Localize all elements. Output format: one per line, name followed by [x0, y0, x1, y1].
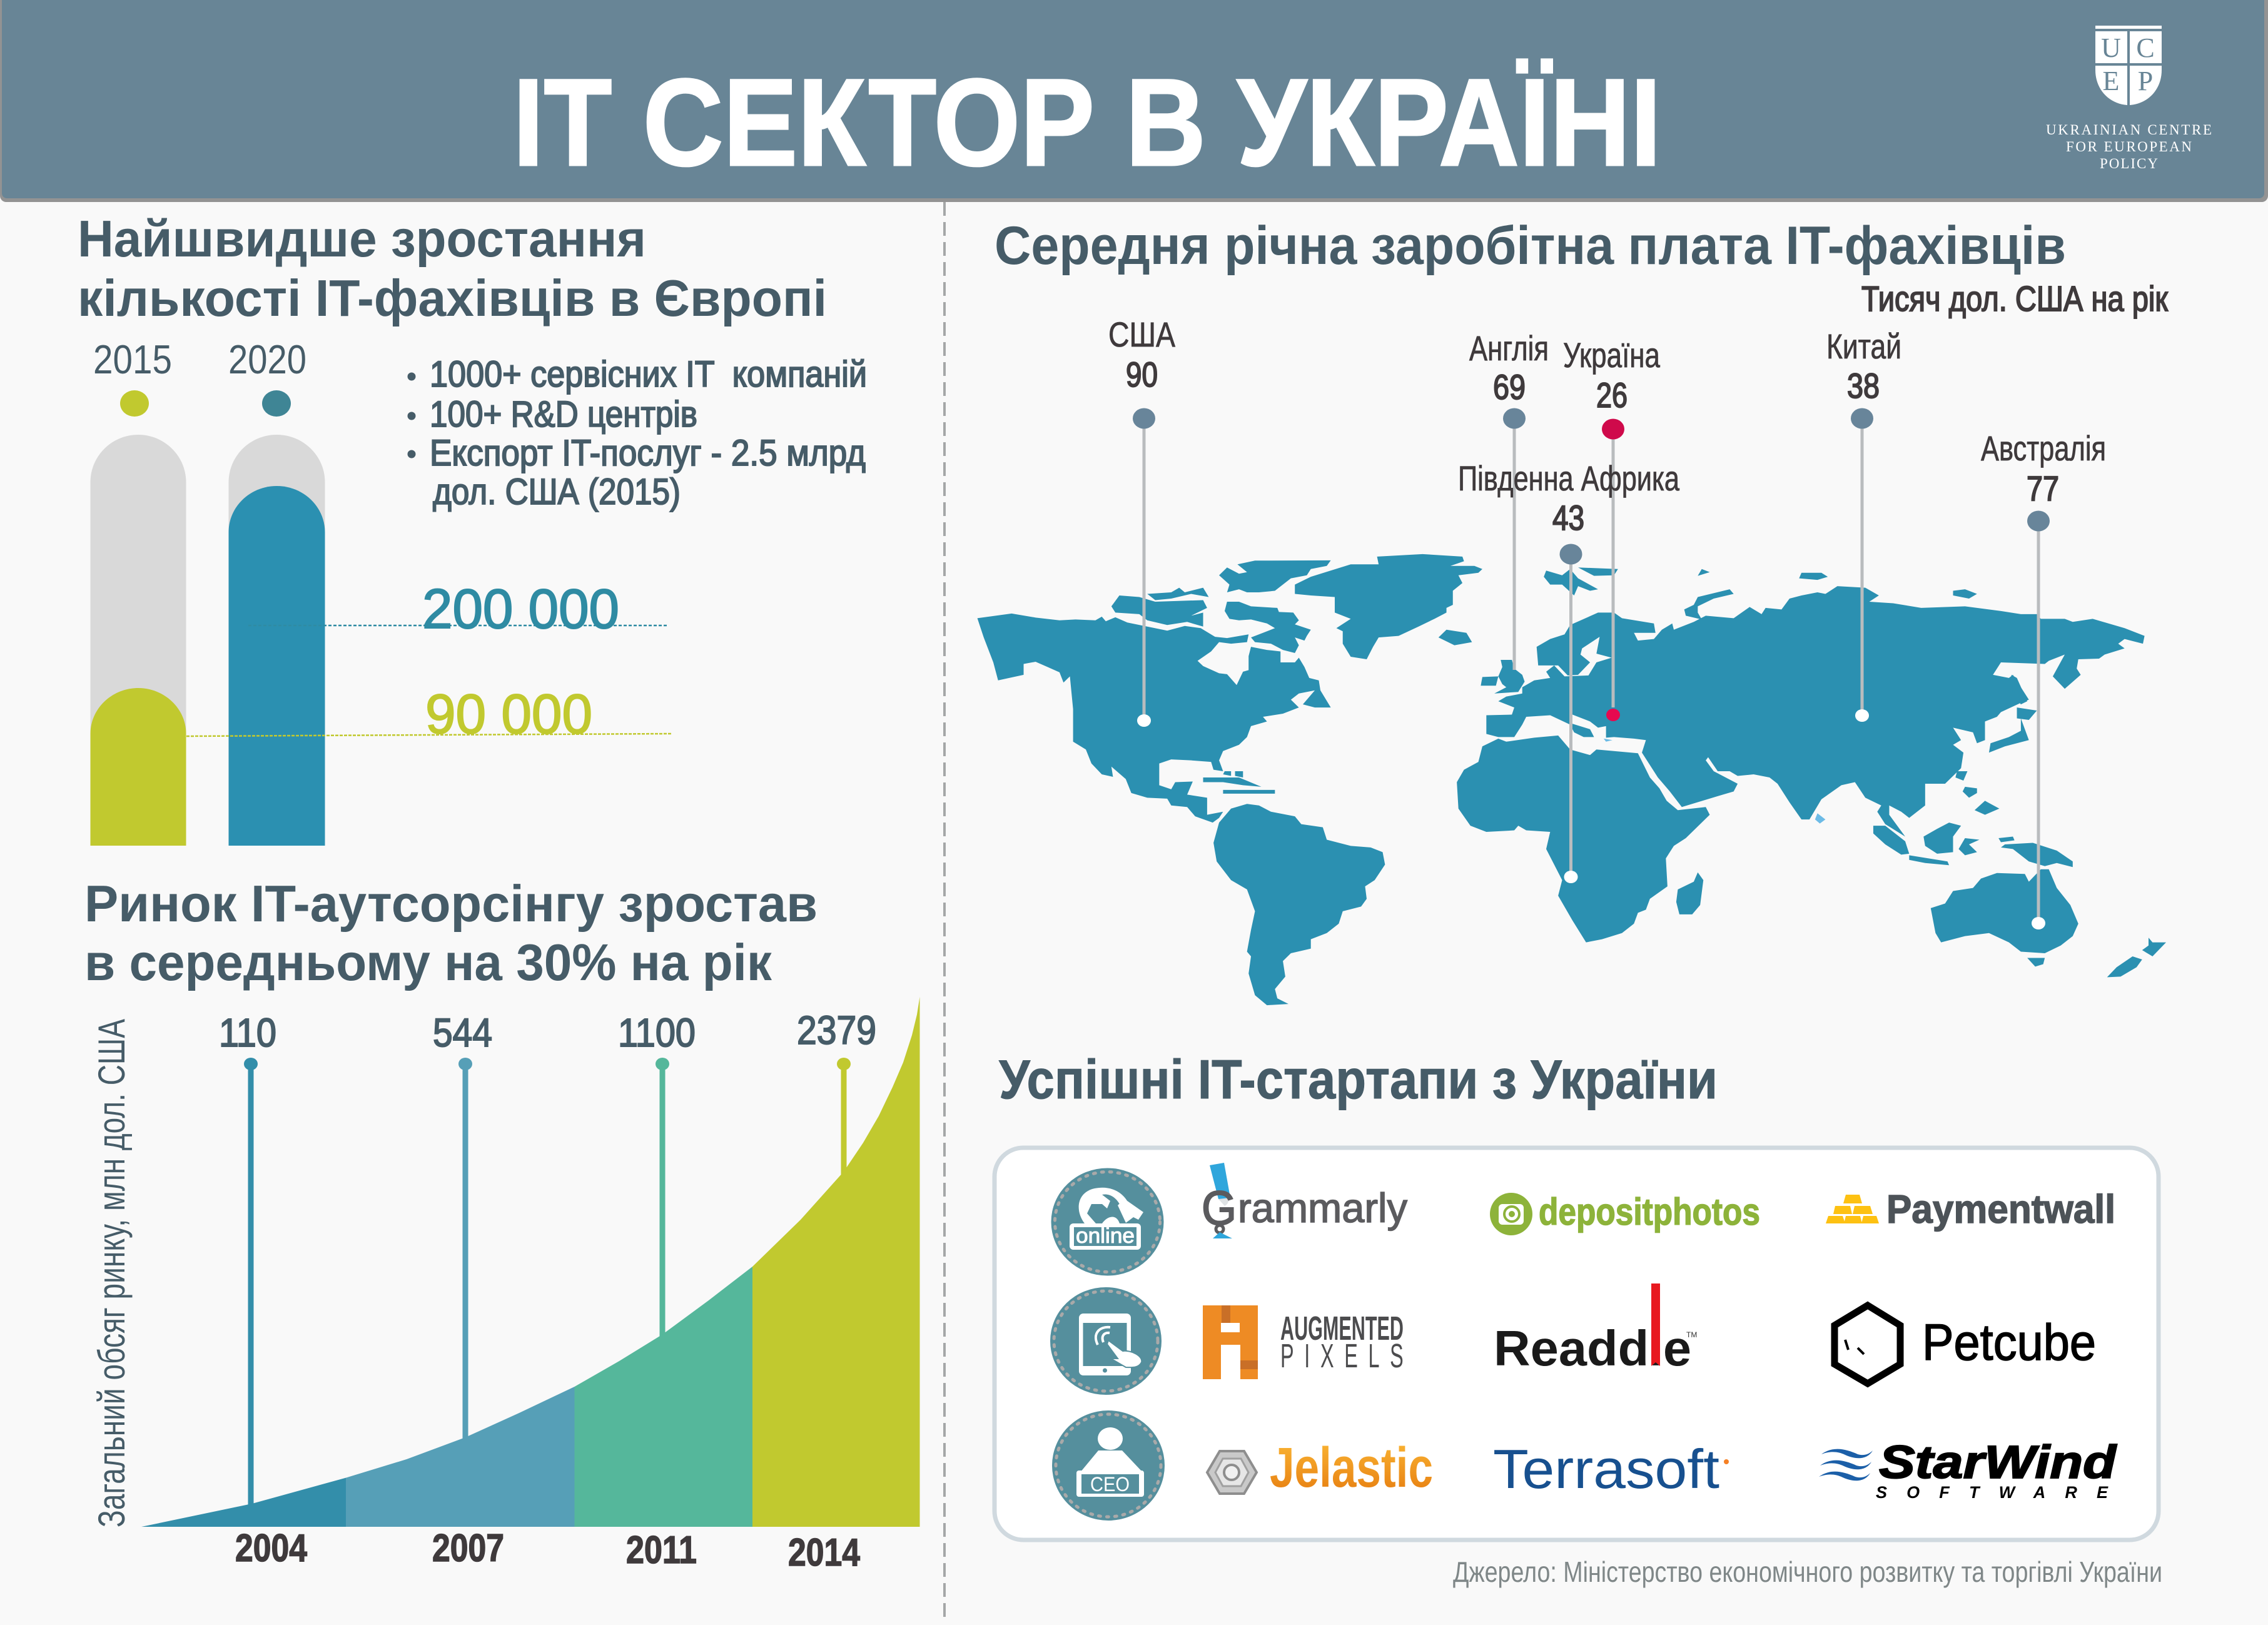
- pin 2007: 544: [433, 1010, 492, 1445]
- map pin: China 38: [1826, 327, 1901, 722]
- logo: Terrasoft: Terrasoft: [1493, 1438, 1719, 1500]
- heading: outsourcing market: в середньому на 30% на рік: [84, 933, 772, 991]
- logo: StarWind: SOFTWARE: [1876, 1483, 2109, 1502]
- world map: [978, 554, 2166, 1005]
- icon: CEO: CEO: [1090, 1473, 1130, 1496]
- year label 2020: 2020: [228, 337, 306, 382]
- map pin: USA 90: 90: [1126, 355, 1158, 394]
- bullet list: Експорт IT-послуг - 2.5 млрд: [430, 433, 866, 473]
- year 2014: 2014: [788, 1531, 860, 1574]
- value 200 000: 200 000: [422, 577, 619, 640]
- bullet list: 1000+ сервісних IT компаній: [430, 354, 867, 395]
- bar chart: IT specialists 2015 vs 2020: [90, 337, 671, 846]
- logo: UCEP shield: C: [2136, 33, 2155, 63]
- pin 2014: 2379: 2379: [797, 1008, 876, 1053]
- heading: fastest growth: Найшвидше зростання: [78, 210, 646, 268]
- heading: outsourcing market: Ринок IT-аутсорсінгу зростав: [84, 874, 818, 933]
- legend dot 2015: [120, 390, 149, 417]
- map pin: China 38: 38: [1847, 366, 1880, 405]
- axis label: Загальний обсяг ринку, млн дол. США: [91, 1019, 133, 1527]
- heading: outsourcing market: [84, 874, 818, 991]
- pin 2004: 110: [219, 1010, 276, 1514]
- pin 2011: 1100: 1100: [618, 1010, 696, 1055]
- pin 2014: 2379: [797, 1008, 876, 1179]
- logo: Jelastic: [1207, 1437, 1433, 1499]
- pin 2004: 110: 110: [219, 1010, 276, 1055]
- heading: fastest growth: кількості IT-фахівців в Європі: [78, 269, 827, 327]
- map pin: Australia 77: Австралія: [1981, 428, 2106, 468]
- map pin: England 69: 69: [1493, 367, 1526, 407]
- year 2011: 2011: [626, 1529, 697, 1572]
- logo: Petcube: [1835, 1305, 2096, 1384]
- map pin: South Africa 43: [1458, 458, 1680, 883]
- year 2004: 2004: [235, 1527, 307, 1570]
- area chart: outsourcing market size: [91, 997, 919, 1574]
- map pin: Ukraine 26: [1563, 335, 1661, 721]
- header banner: [0, 0, 2268, 202]
- bullet list: [408, 354, 867, 512]
- logo: Augmented Pixels: [1203, 1305, 1404, 1379]
- title: IT СЕКТОР В УКРАЇНІ: [513, 53, 1661, 191]
- year 2007: 2007: [432, 1527, 504, 1570]
- legend dot 2020: [262, 390, 291, 417]
- bar 2015: [90, 435, 186, 846]
- logo: StarWind: [1819, 1436, 2117, 1502]
- logo: Readdle: TM: [1686, 1330, 1697, 1339]
- icon: tablet: [1050, 1287, 1162, 1395]
- logo: Readdle: Readdle: [1494, 1320, 1691, 1376]
- logo: UCEP shield: FOR EUROPEAN: [2066, 139, 2192, 154]
- area segment 2007: [346, 1387, 574, 1527]
- map pin: Australia 77: [1981, 428, 2106, 929]
- area segment 2014: [752, 997, 919, 1527]
- panel: startup logos: [995, 1148, 2159, 1540]
- map pin: Ukraine 26: 26: [1596, 375, 1628, 415]
- value 90 000: 90 000: [425, 682, 592, 745]
- logo: UCEP shield: U: [2101, 33, 2121, 63]
- map pin: South Africa 43: 43: [1552, 498, 1584, 537]
- map pin: Australia 77: 77: [2027, 468, 2059, 508]
- logo: UCEP shield: P: [2138, 66, 2153, 96]
- logo: Grammarly: [1202, 1163, 1407, 1238]
- area segment 2004: [141, 1478, 346, 1527]
- map pin: USA 90: США: [1108, 315, 1176, 354]
- logo: UCEP shield: UKRAINIAN CENTRE: [2046, 122, 2212, 138]
- logo: Augmented Pixels: AUGMENTED: [1280, 1310, 1404, 1347]
- unit note: Тисяч дол. США на рік: [1861, 279, 2169, 319]
- bar 2020: [229, 435, 325, 846]
- logo: UCEP shield: POLICY: [2100, 156, 2158, 171]
- logo: Readdle: [1494, 1283, 1697, 1376]
- map pin: China 38: Китай: [1826, 327, 1901, 366]
- map pin: South Africa 43: Південна Африка: [1458, 458, 1680, 498]
- heading: average salary: Середня річна заробітна плата IT-фахівців: [995, 216, 2066, 276]
- logo: UCEP shield: [2046, 26, 2212, 171]
- logo: Augmented Pixels: PIXELS: [1280, 1338, 1404, 1375]
- area segment 2011: [574, 1267, 752, 1527]
- heading: startups: Успішні IT-стартапи з України: [999, 1048, 1718, 1110]
- icon: CEO: [1052, 1410, 1165, 1521]
- pin 2011: 1100: [618, 1010, 696, 1342]
- map pin: England 69: Англія: [1469, 328, 1549, 368]
- logo: Grammarly: G: [1202, 1182, 1237, 1235]
- logo: depositphotos: depositphotos: [1539, 1191, 1760, 1233]
- logo: Paymentwall: Paymentwall: [1886, 1187, 2115, 1232]
- map pin: Ukraine 26: Україна: [1563, 335, 1661, 375]
- logo: Jelastic: Jelastic: [1270, 1437, 1433, 1499]
- logo: StarWind: StarWind: [1879, 1436, 2117, 1488]
- bullet list: дол. США (2015): [433, 472, 681, 512]
- year label 2015: 2015: [93, 337, 172, 382]
- logo: UCEP shield: E: [2103, 66, 2119, 96]
- icon: online: online: [1076, 1224, 1135, 1248]
- heading: fastest growth: [78, 210, 827, 327]
- icon: online: [1051, 1168, 1163, 1276]
- pin 2007: 544: 544: [433, 1010, 492, 1055]
- logo: depositphotos: [1490, 1191, 1760, 1235]
- logo: Petcube: Petcube: [1922, 1314, 2096, 1371]
- map pin: USA 90: [1108, 315, 1176, 727]
- bullet list: 100+ R&D центрів: [430, 394, 697, 435]
- map pin: England 69: [1469, 328, 1549, 670]
- logo: Grammarly: rammarly: [1238, 1185, 1407, 1231]
